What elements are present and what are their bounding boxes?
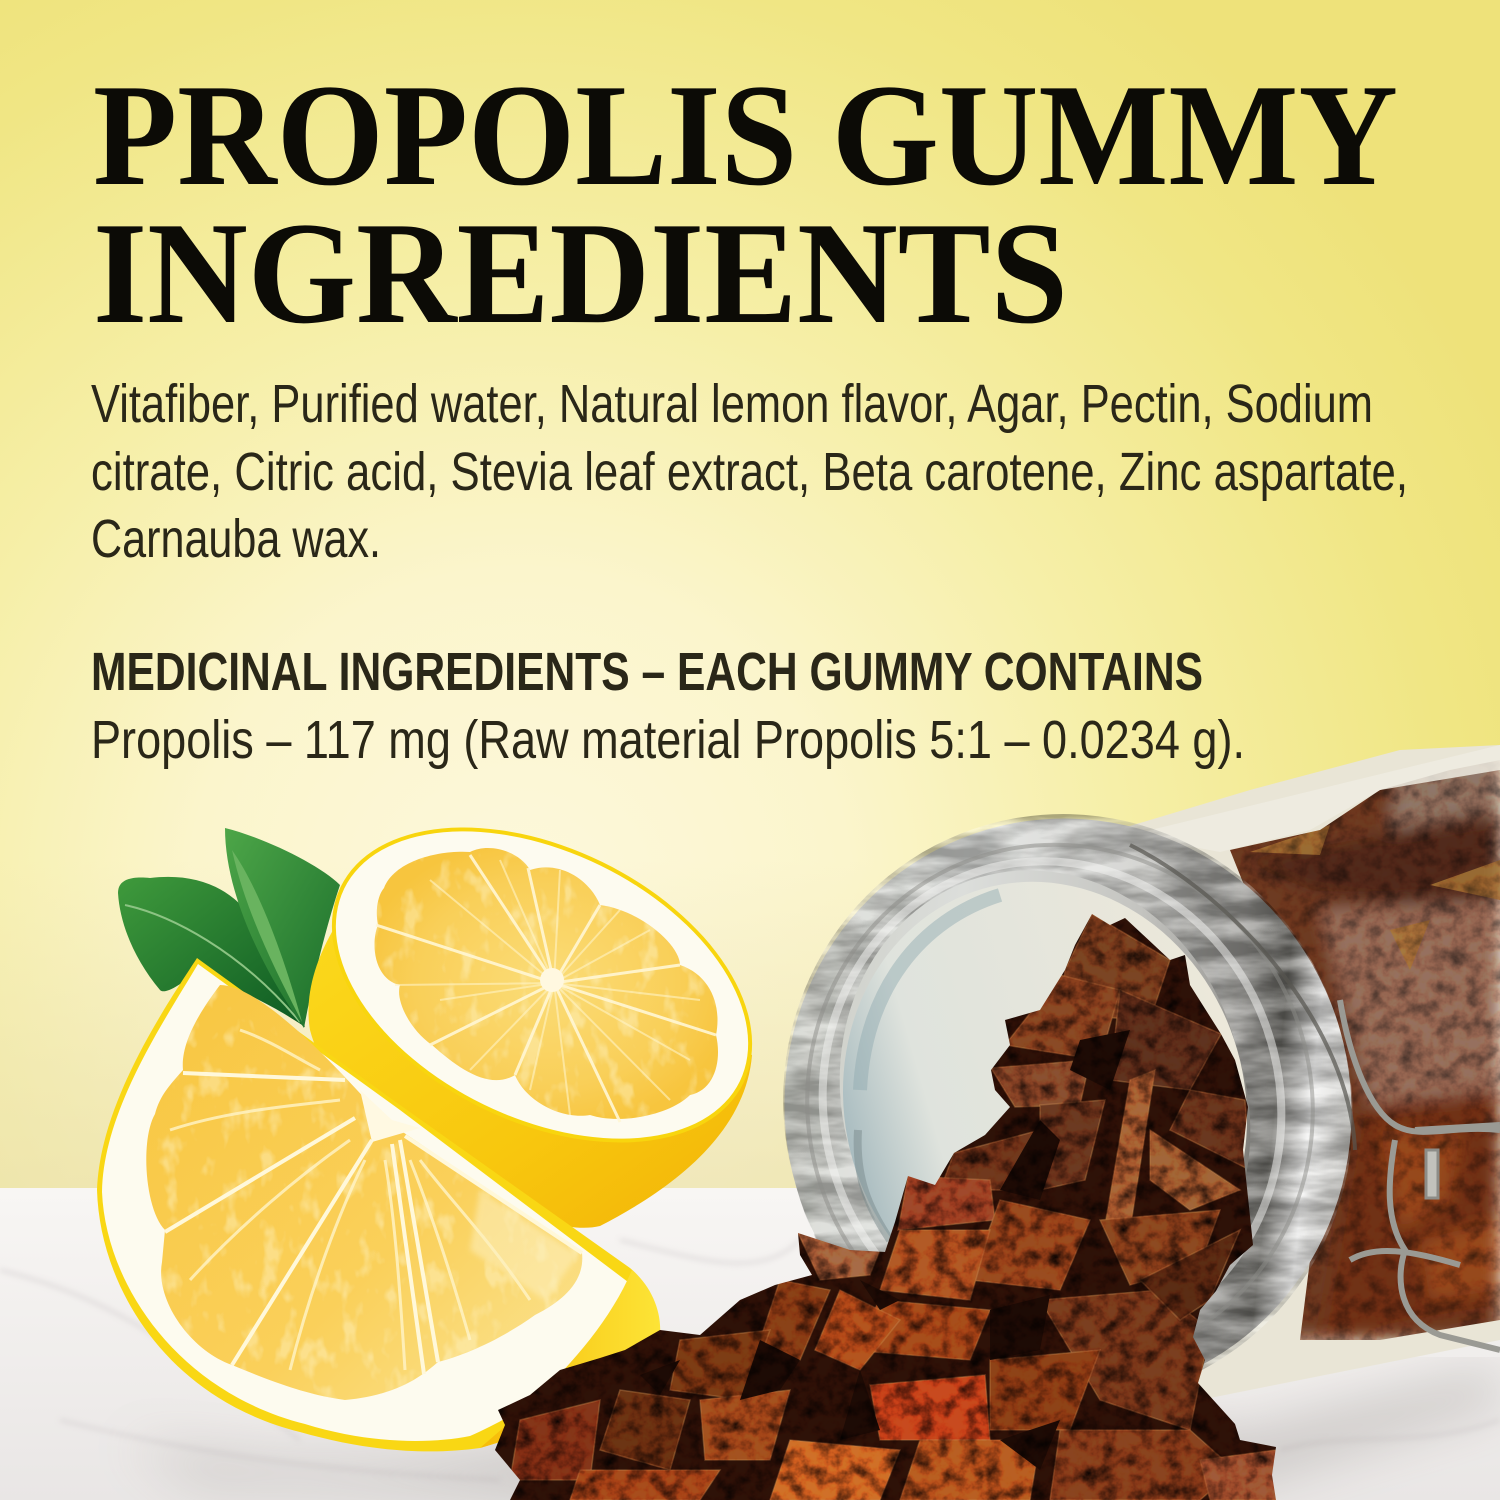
propolis pile	[480, 900, 1300, 1500]
propolis inside jar body	[1130, 740, 1500, 1350]
background gradient	[0, 0, 1500, 1190]
icon: lemon leaves	[118, 828, 340, 1028]
jar opening	[791, 834, 1299, 1376]
icon: lemon wedge	[97, 958, 660, 1451]
medicinal ingredients text: Propolis – 117 mg (Raw material Propolis 5:1 – 0.0234 g).	[91, 710, 1245, 770]
crevice shadows	[640, 1030, 1130, 1470]
medicinal ingredients text	[91, 642, 1245, 770]
title: PROPOLIS GUMMY	[93, 54, 1398, 216]
jar	[783, 745, 1500, 1398]
chunk grain	[480, 900, 1300, 1500]
wire clasp	[1340, 1000, 1500, 1350]
propolis chunks	[510, 914, 1276, 1500]
ingredient list text	[91, 374, 1408, 569]
icon: halved lemon	[308, 828, 752, 1228]
title: INGREDIENTS	[93, 192, 1068, 354]
ingredient list text: Carnauba wax.	[91, 509, 381, 569]
title	[93, 54, 1398, 354]
lemon flesh	[374, 848, 718, 1122]
shadow under objects	[120, 1370, 1500, 1500]
medicinal ingredients text: MEDICINAL INGREDIENTS – EACH GUMMY CONTAINS	[91, 642, 1203, 702]
jar body glass	[1100, 745, 1500, 1400]
jar rim	[716, 751, 1420, 1465]
wedge flesh	[146, 985, 583, 1400]
marble table surface	[0, 1188, 1500, 1500]
